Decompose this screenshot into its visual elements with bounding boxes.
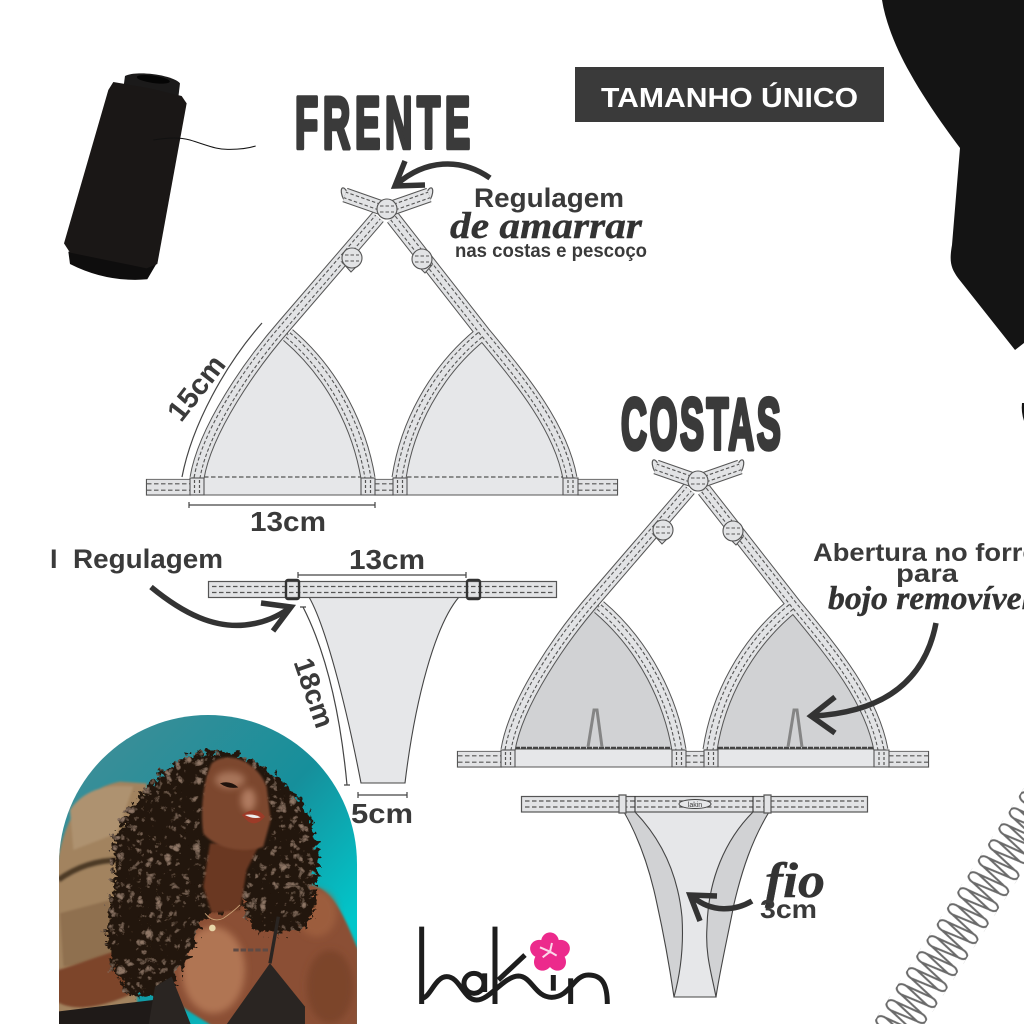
text: regulagem de amarrar: de amarrar [450, 206, 643, 247]
diagram: back bottom [522, 795, 868, 997]
text: fio 3cm [760, 852, 825, 924]
label tag: lakin [688, 802, 702, 809]
badge: tamanho único [575, 67, 884, 122]
text: regulagem de amarrar: Regulagem [474, 183, 624, 213]
arrow: regulagem to buckle [151, 587, 291, 631]
text: abertura no forro: para [896, 560, 959, 588]
hair [103, 748, 315, 993]
dimension: front 13cm: 13cm [250, 506, 326, 537]
title: COSTAS: COSTAS [621, 384, 783, 465]
cup lower panels [515, 749, 874, 767]
neck [203, 843, 260, 913]
diagram: front top [146, 187, 618, 495]
text: fio 3cm: fio [765, 852, 825, 908]
straps [508, 467, 881, 750]
necklace [205, 905, 240, 920]
rock [57, 782, 147, 1024]
left arm [59, 952, 132, 1008]
dimension: bottom 13cm: 13cm [349, 544, 425, 575]
arrow: frente regulagem [395, 161, 490, 186]
tattoo [233, 948, 268, 952]
straps [197, 195, 570, 478]
diagram: back top [458, 459, 928, 767]
text: regulagem de amarrar [450, 183, 647, 262]
photo: model in arch frame [57, 715, 358, 1024]
knot and tags [653, 471, 743, 545]
dimension: 18cm: 18cm [288, 654, 340, 732]
text: I regulagem: I [50, 544, 58, 574]
badge: tamanho único: TAMANHO ÚNICO [601, 82, 858, 113]
arrow: fio [690, 895, 752, 921]
swimsuit [148, 963, 305, 1024]
diagram: front bottom [208, 580, 556, 783]
towel shadow [57, 1000, 153, 1024]
title: FRENTE: FRENTE [295, 83, 475, 164]
spring coil bottom right [864, 749, 1024, 1024]
side straps [458, 752, 928, 767]
stitched blocks [190, 478, 578, 495]
logo: Lakin [422, 927, 607, 1004]
side straps [146, 480, 618, 495]
text: fio 3cm: 3cm [760, 894, 817, 924]
cups [508, 597, 881, 767]
knot and tags [342, 199, 432, 273]
dimension: 15cm: 15cm [161, 349, 232, 428]
strap ends [651, 459, 745, 475]
icon: hibiscus [528, 932, 572, 974]
dimension: 18cm [288, 607, 350, 785]
dimension: front 13cm [189, 502, 375, 537]
dimension: 5cm: 5cm [351, 798, 413, 829]
face [202, 757, 271, 850]
text: abertura no forro [813, 539, 1024, 617]
black garment top right [882, 0, 1024, 421]
stitched blocks [501, 750, 889, 767]
text: regulagem de amarrar: nas costas e pescoço [455, 241, 647, 262]
text: abertura no forro: Abertura no forro [813, 539, 1024, 567]
text: I regulagem: Regulagem [73, 544, 223, 574]
torso [174, 884, 357, 1024]
dimension: bottom 13cm [298, 544, 466, 578]
label tag [679, 800, 711, 809]
buckles [286, 580, 299, 599]
bojo openings [588, 710, 602, 747]
cups [197, 325, 570, 495]
dimension: 15cm [161, 323, 262, 477]
icon: thread cone [64, 73, 256, 280]
strap ends [340, 187, 434, 203]
text: abertura no forro: bojo removível [828, 581, 1024, 617]
arrow: bojo removivel [811, 623, 936, 733]
